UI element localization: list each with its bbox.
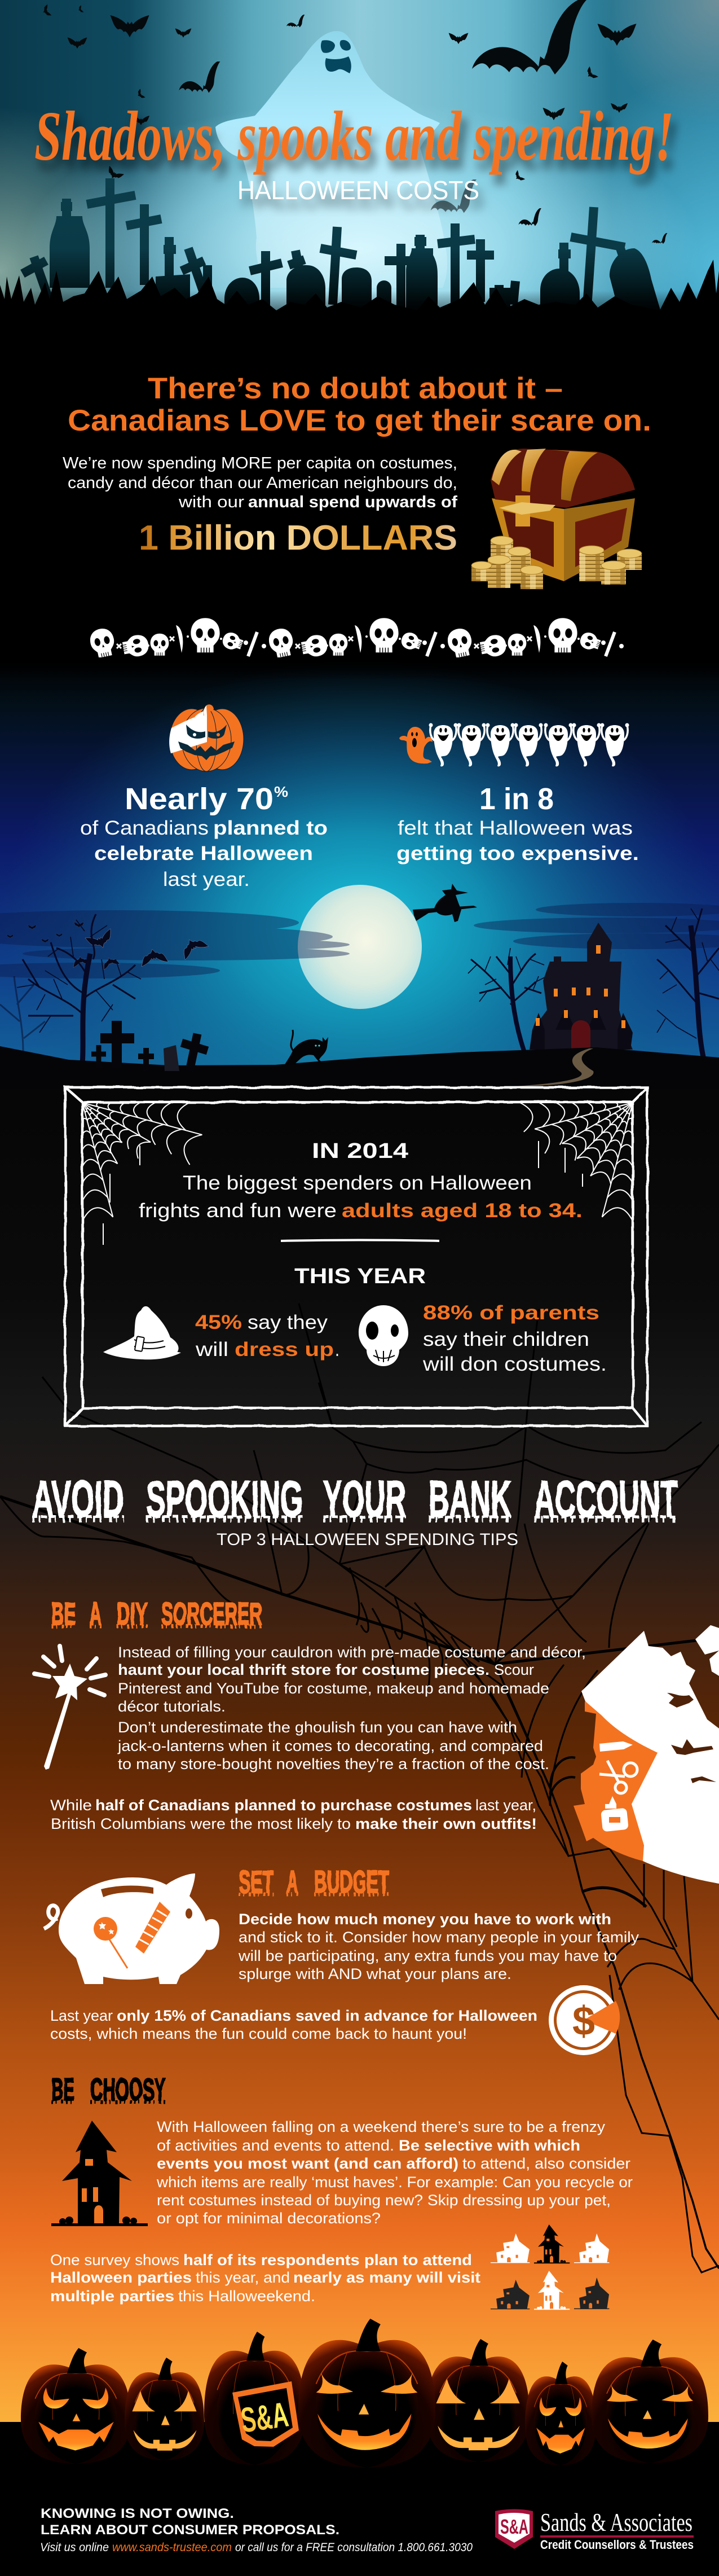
heading: no doubt bbox=[68, 372, 651, 437]
logo: Sands and Associates bbox=[495, 2508, 694, 2552]
pumpkin 3 with S&A shield: S&A bbox=[239, 2395, 291, 2441]
icon: six small houses bbox=[491, 2224, 609, 2310]
text block: survey parties: Halloween parties bbox=[50, 2269, 192, 2286]
heading: set a budget bbox=[239, 1864, 389, 1899]
text block: saved in advance: Last year bbox=[50, 2007, 113, 2024]
panel: tip 1 be a DIY sorcerer bbox=[34, 1596, 586, 1832]
call to action bbox=[41, 2506, 339, 2538]
stat: 1 in 8: 1 in 8 bbox=[479, 782, 554, 816]
icon: dollar pie coin: $ bbox=[572, 1999, 595, 2044]
text block: thrift store: haunt your local thrift store for costume pieces. bbox=[118, 1661, 489, 1678]
pumpkin 5 bbox=[426, 2339, 530, 2462]
text block: thrift store: Pinterest and YouTube for costume, makeup and homemade bbox=[118, 1680, 549, 1697]
logo: Sands and Associates: Credit Counsellors & Trustees bbox=[540, 2538, 694, 2552]
icon: witch on broom bbox=[413, 884, 477, 922]
text block: thrift store: Don’t underestimate the ghoulish fun you can have with bbox=[118, 1719, 517, 1736]
stat: 88 percent of parents: say their children bbox=[423, 1328, 589, 1350]
text block: survey parties: multiple parties bbox=[50, 2288, 174, 2305]
heading: be a diy sorcerer: DIY bbox=[117, 1596, 148, 1631]
stat: nearly 70 percent bbox=[80, 782, 328, 890]
heading: be a diy sorcerer: SORCERER bbox=[161, 1596, 262, 1631]
stat: 45 percent: say they bbox=[248, 1311, 328, 1333]
heading: avoid spooking your bank account: YOUR bbox=[323, 1471, 406, 1528]
panel: moonlit night scene bbox=[0, 657, 719, 1089]
icon: treasure chest bbox=[471, 449, 642, 589]
call to action: LEARN ABOUT CONSUMER PROPOSALS. bbox=[41, 2522, 339, 2538]
text block: survey parties: One survey shows bbox=[50, 2252, 179, 2268]
panel: intro on black bbox=[63, 372, 651, 659]
text block: saved in advance: only 15% of Canadians saved in advance for Halloween bbox=[117, 2007, 537, 2024]
icon: scissors bbox=[599, 1761, 637, 1793]
call to action: KNOWING IS NOT OWING. bbox=[41, 2506, 234, 2521]
crosses bbox=[91, 1021, 208, 1071]
subtitle: HALLOWEEN COSTS bbox=[237, 175, 479, 205]
pumpkin 3 with S&A shield bbox=[204, 2332, 305, 2465]
heading: be choosy: CHOOSY bbox=[90, 2072, 166, 2107]
stat: 88 percent of parents: 88% of parents bbox=[423, 1302, 599, 1324]
text block: decide how much: Decide how much money you have to work with bbox=[239, 1911, 611, 1928]
contact line: Visit us online bbox=[40, 2541, 109, 2554]
panel: footer bbox=[40, 2506, 694, 2554]
stat: nearly 70 percent: % bbox=[274, 783, 288, 800]
ground hill bbox=[0, 1046, 719, 1089]
clouds bbox=[0, 903, 719, 978]
text block: survey parties: this Halloweekend. bbox=[178, 2288, 315, 2305]
heading: in 2014: IN 2014 bbox=[312, 1139, 408, 1163]
text block: survey parties: half of its respondents plan to attend bbox=[183, 2252, 472, 2268]
icon: glue bottle bbox=[601, 1796, 629, 1832]
text block: thrift store bbox=[117, 1644, 586, 1772]
pumpkin 7 bbox=[592, 2340, 708, 2463]
heading: avoid spooking your bank account bbox=[32, 1471, 678, 1528]
text block: british columbians: last year, bbox=[475, 1797, 536, 1814]
frame border bbox=[65, 1087, 647, 1426]
stat: nearly 70 percent: planned to bbox=[213, 817, 328, 839]
pumpkin 6 bbox=[525, 2362, 596, 2465]
text block: selective events: of activities and events to attend. bbox=[157, 2137, 394, 2154]
heading: be a diy sorcerer: A bbox=[90, 1596, 102, 1631]
stat: 1 in 8: getting too expensive. bbox=[396, 842, 639, 864]
graveyard silhouette bbox=[0, 178, 719, 350]
icon: stitched skull bbox=[359, 1305, 408, 1366]
heading: avoid spooking your bank account: SPOOKING bbox=[146, 1471, 303, 1528]
text block: saved in advance bbox=[50, 2007, 537, 2042]
stat: 45 percent: will bbox=[195, 1339, 228, 1361]
text block: selective events: Be selective with which bbox=[399, 2137, 580, 2154]
text block: selective events: to attend, also consider bbox=[462, 2155, 630, 2172]
panel: chalk frame 2014 and this year bbox=[52, 1087, 663, 1426]
text block: spending per capita: annual spend upwards of bbox=[248, 493, 457, 511]
panel: tip 2 set a budget bbox=[44, 1864, 639, 2055]
icon: map of Canada with BC highlighted bbox=[574, 1625, 719, 1884]
text block: thrift store: to many store-bought novelties they’re a fraction of the cost. bbox=[118, 1756, 549, 1772]
contact line bbox=[40, 2541, 473, 2554]
icon: magic wand bbox=[34, 1646, 105, 1770]
stat: nearly 70 percent: last year. bbox=[163, 868, 250, 890]
text block: survey parties: this year, and bbox=[196, 2269, 290, 2286]
stat: 1 in 8 bbox=[396, 782, 639, 864]
text block: selective events: rent costumes instead of buying new? Skip dressing up your pet, bbox=[157, 2192, 611, 2209]
road bbox=[513, 1048, 594, 1086]
icon: full moon bbox=[298, 885, 422, 1009]
heading: be a diy sorcerer bbox=[51, 1596, 262, 1631]
text block: biggest spenders bbox=[139, 1172, 583, 1222]
icon: pumpkin 70 percent bbox=[169, 704, 244, 771]
panel: hero graveyard scene bbox=[0, 0, 719, 353]
text block: decide how much: and stick to it. Consider how many people in your family bbox=[239, 1929, 639, 1946]
stat: nearly 70 percent: of Canadians bbox=[80, 817, 209, 839]
stat: 1 Billion Dollars: 1 Billion DOLLARS bbox=[139, 519, 457, 558]
heading: no doubt: Canadians LOVE to get their scare on. bbox=[68, 404, 651, 437]
heading: set a budget: BUDGET bbox=[314, 1864, 389, 1899]
icon: crayon bbox=[599, 1741, 633, 1752]
text block: thrift store: Instead of filling your cauldron with pre-made costume and décor, bbox=[118, 1644, 586, 1661]
icon: dollar pie coin bbox=[549, 1985, 620, 2055]
decorative skull row bbox=[88, 618, 624, 659]
text block: selective events: events you most want (and can afford) bbox=[157, 2155, 458, 2172]
stat: nearly 70 percent: celebrate Halloween bbox=[94, 842, 313, 864]
stat: 88 percent of parents: will don costumes. bbox=[422, 1353, 607, 1375]
icon: lollipop bbox=[94, 1917, 127, 1968]
heading: avoid spooking your bank account: BANK bbox=[429, 1471, 511, 1528]
pumpkin 4 bbox=[298, 2319, 435, 2468]
text block: thrift store: décor tutorials. bbox=[118, 1698, 226, 1715]
text block: thrift store: Scour bbox=[494, 1661, 534, 1678]
text block: decide how much bbox=[238, 1911, 639, 1982]
text block: spending per capita: We’re now spending MORE per capita on costumes, bbox=[63, 454, 457, 472]
heading: set a budget: SET bbox=[239, 1864, 274, 1899]
heading: this year: THIS YEAR bbox=[294, 1265, 426, 1288]
stat: 45 percent: dress up bbox=[235, 1339, 334, 1361]
icon: scene bats bbox=[7, 922, 209, 970]
heading: no doubt: There’s no doubt about it – bbox=[148, 372, 563, 405]
icon: wrapped candy bbox=[135, 1902, 170, 1954]
stat: 45 percent bbox=[195, 1311, 339, 1361]
text block: selective events: With Halloween falling on a weekend there’s sure to be a frenzy bbox=[157, 2118, 606, 2135]
panel: jack-o-lantern row bbox=[0, 2319, 719, 2576]
text block: british columbians bbox=[50, 1797, 537, 1832]
heading: be choosy bbox=[51, 2072, 166, 2107]
text block: british columbians: make their own outfits! bbox=[355, 1815, 537, 1832]
icon: row of ghosts bbox=[399, 723, 629, 766]
subheading: top 3 tips: TOP 3 HALLOWEEN SPENDING TIPS bbox=[217, 1530, 518, 1549]
contact line: or call us for a FREE consultation 1.800.661.3030 bbox=[235, 2541, 473, 2554]
text block: survey parties bbox=[50, 2252, 480, 2305]
text block: decide how much: splurge with AND what your plans are. bbox=[239, 1965, 511, 1982]
cobweb left bbox=[52, 1103, 202, 1225]
stat: 88 percent of parents bbox=[422, 1302, 607, 1375]
panel: tip 3 be choosy bbox=[50, 2072, 633, 2310]
text block: biggest spenders: adults aged 18 to 34. bbox=[342, 1200, 583, 1222]
pumpkin 1 bbox=[21, 2348, 131, 2464]
icon: haunted house bbox=[51, 2121, 148, 2226]
stat: 1 in 8: felt that Halloween was bbox=[398, 817, 633, 839]
text block: thrift store: jack-o-lanterns when it comes to decorating, and compared bbox=[117, 1737, 543, 1754]
heading: avoid spooking your bank account: AVOID bbox=[32, 1471, 124, 1528]
icon: ghost bbox=[215, 31, 447, 288]
icon: haunted castle bbox=[530, 923, 633, 1050]
text block: british columbians: British Columbians were the most likely to bbox=[51, 1815, 351, 1832]
heading: be choosy: BE bbox=[51, 2072, 74, 2107]
text block: spending per capita: with our bbox=[178, 493, 244, 511]
text block: spending per capita bbox=[63, 454, 457, 511]
stat: 45 percent: 45% bbox=[195, 1311, 242, 1333]
text block: saved in advance: costs, which means the fun could come back to haunt you! bbox=[50, 2025, 467, 2042]
cobweb right bbox=[520, 1103, 663, 1225]
spider web background bbox=[0, 1304, 719, 2272]
trees bbox=[0, 909, 719, 1064]
icon: witch hat bbox=[103, 1306, 181, 1359]
heading: be a diy sorcerer: BE bbox=[51, 1596, 76, 1631]
contact line: www.sands-trustee.com bbox=[112, 2541, 232, 2554]
heading: set a budget: A bbox=[286, 1864, 298, 1899]
stat: nearly 70 percent: Nearly 70 bbox=[125, 782, 274, 816]
text block: biggest spenders: frights and fun were bbox=[139, 1200, 337, 1222]
icon: bats bbox=[41, 0, 667, 244]
icon: piggy bank with candy bbox=[44, 1873, 219, 1984]
icon: coin stacks bbox=[471, 536, 642, 589]
pumpkin 2 bbox=[125, 2358, 204, 2460]
icon: black cat bbox=[284, 1030, 328, 1065]
text block: selective events: which items are really ‘must haves’. For example: Can you recycle or bbox=[156, 2174, 633, 2191]
text block: biggest spenders: The biggest spenders on Halloween bbox=[183, 1172, 532, 1194]
text block: selective events: or opt for minimal decorations? bbox=[157, 2210, 381, 2227]
text block: survey parties: nearly as many will visit bbox=[293, 2269, 480, 2286]
text block: spending per capita: candy and décor than our American neighbours do, bbox=[68, 474, 457, 492]
text block: british columbians: While bbox=[50, 1797, 92, 1814]
web threads bbox=[103, 1141, 583, 1245]
text block: decide how much: will be participating, any extra funds you may have to bbox=[238, 1947, 617, 1964]
logo: Sands and Associates: S&A bbox=[500, 2515, 528, 2538]
text block: british columbians: half of Canadians planned to purchase costumes bbox=[95, 1797, 472, 1814]
stat: 45 percent: . bbox=[335, 1339, 339, 1361]
text block: selective events bbox=[156, 2118, 633, 2227]
